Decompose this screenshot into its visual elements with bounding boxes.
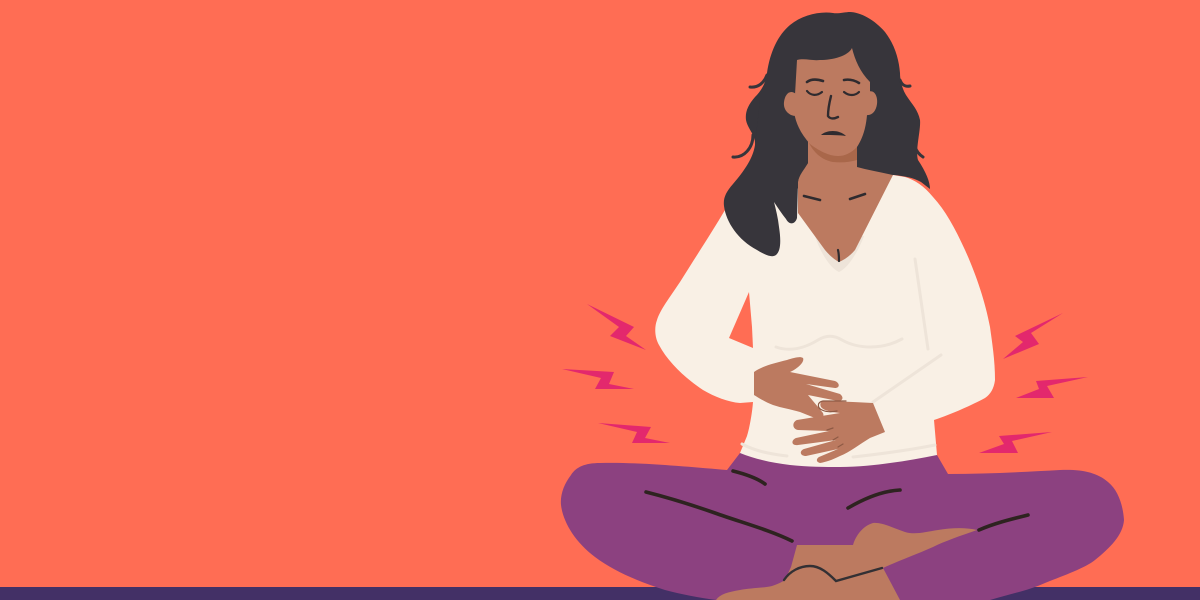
left ear xyxy=(784,92,796,116)
upper hand xyxy=(754,357,842,418)
mouth xyxy=(821,131,846,136)
hair front lock xyxy=(724,100,808,256)
neckline shadow xyxy=(815,236,864,272)
foot outline xyxy=(784,566,882,581)
hair wisps xyxy=(733,75,923,157)
sweater xyxy=(655,175,995,467)
finger details xyxy=(818,401,846,447)
hair back xyxy=(733,12,930,190)
right ear xyxy=(866,91,877,115)
facial features xyxy=(804,80,865,261)
pain bolts left xyxy=(562,304,670,443)
lower hand xyxy=(792,401,885,463)
crossed foot xyxy=(716,523,977,600)
chin shadow xyxy=(809,143,857,162)
pain bolts right xyxy=(979,313,1088,453)
neck and chest xyxy=(798,135,893,262)
face xyxy=(794,48,870,156)
sweater creases xyxy=(742,259,941,457)
pants xyxy=(561,453,1124,600)
trouser creases xyxy=(646,471,1028,541)
floor bar xyxy=(0,587,1200,600)
orange gap between arm and body xyxy=(729,292,753,348)
